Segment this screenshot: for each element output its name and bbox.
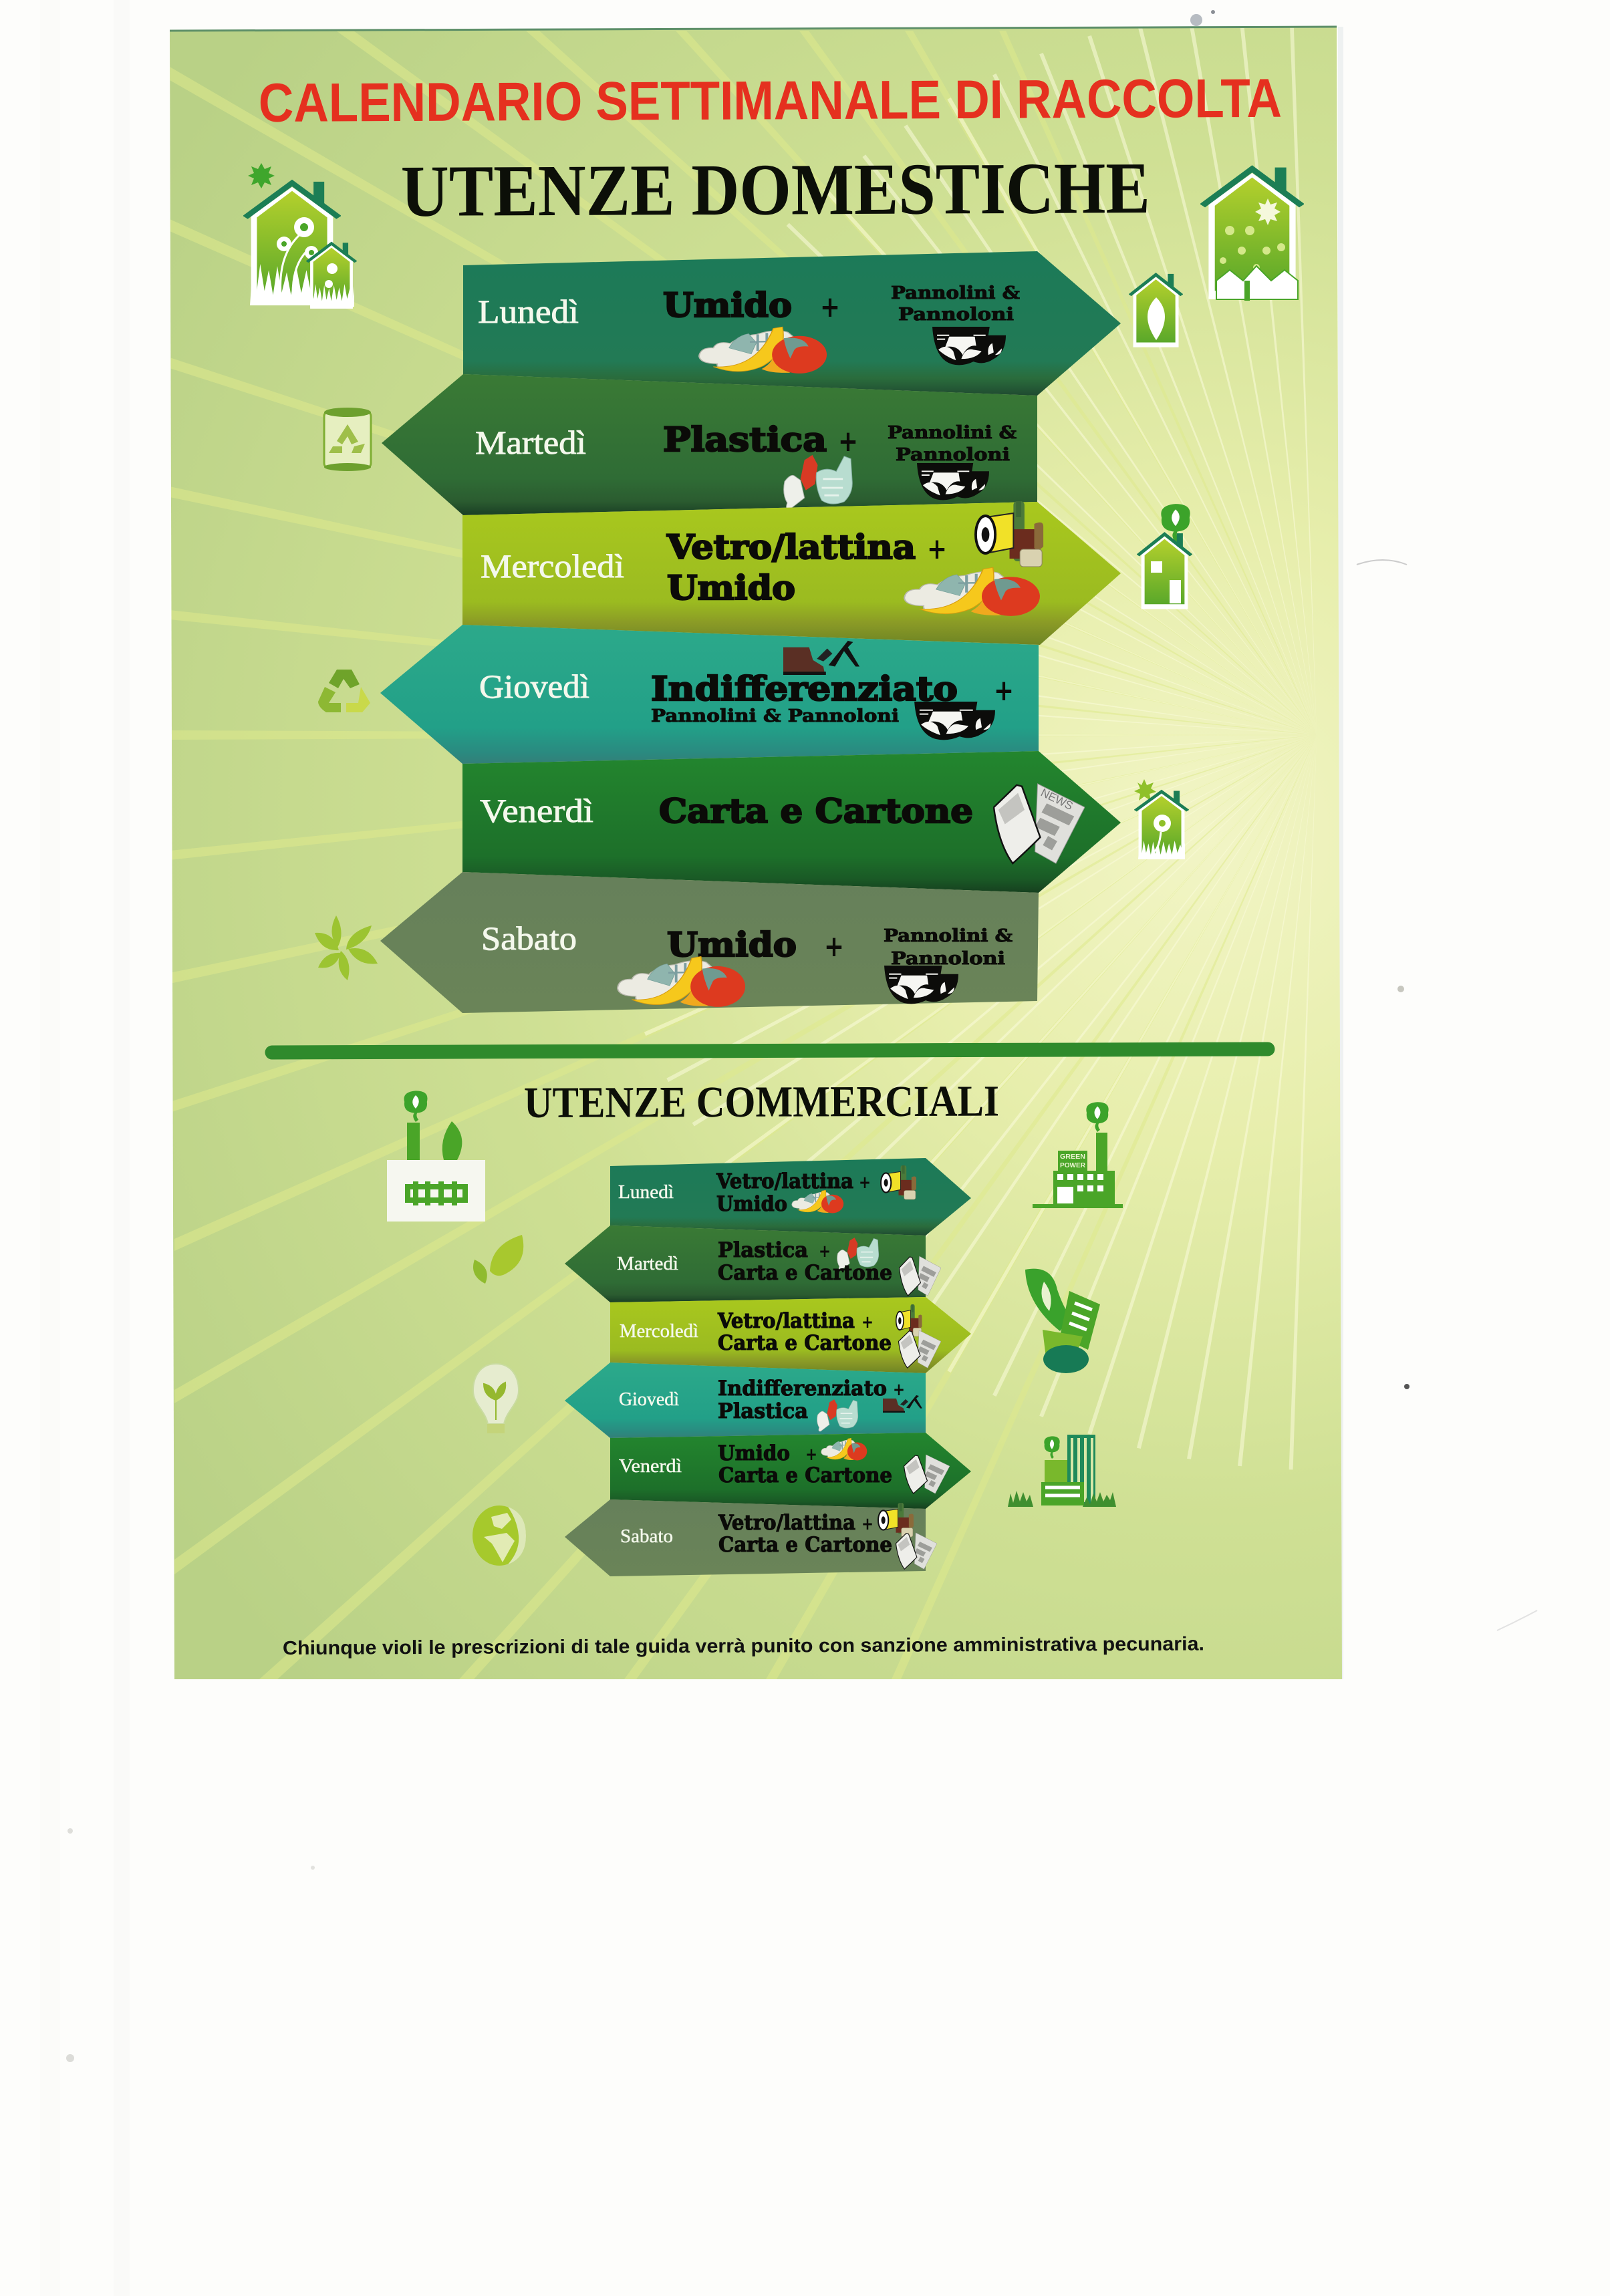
banner: Mercoledì commercial: + <box>861 1312 874 1332</box>
banner: Venerdì commercial: Venerdì <box>619 1455 682 1477</box>
banner: Martedì commercial: Martedì <box>617 1253 678 1274</box>
banner: Lunedì domestic: Pannolini & <box>891 283 1020 303</box>
banner: Sabato domestic: Pannolini & <box>884 926 1013 946</box>
banner: Giovedì commercial: Indifferenziato <box>718 1377 887 1401</box>
icon: garden house right <box>1202 168 1302 301</box>
icon: leaf house <box>1130 274 1182 347</box>
banner: Mercoledì commercial: Mercoledì <box>620 1320 698 1342</box>
icon: two leaves <box>473 1235 523 1284</box>
banner: Giovedì commercial: Plastica <box>718 1399 808 1423</box>
banner: Giovedì domestic: Indifferenziato <box>651 669 958 708</box>
icon: green house with tree smoke <box>1138 504 1191 609</box>
banner: Giovedì domestic: Giovedì <box>479 668 589 705</box>
icon: white factory card <box>387 1091 485 1222</box>
icon: green city <box>1008 1435 1116 1507</box>
banner: Sabato domestic: Umido <box>667 925 797 964</box>
banner: Giovedì domestic: + <box>994 674 1014 708</box>
banner: Mercoledì domestic: Umido <box>667 568 795 607</box>
banner: Martedì commercial: + <box>819 1242 831 1262</box>
banner: Lunedì domestic: Umido <box>663 285 792 325</box>
banner: Martedì domestic: Martedì <box>475 424 586 461</box>
poster panel <box>170 1 1342 1679</box>
banner: Sabato domestic: Pannoloni <box>891 949 1005 969</box>
banner: Martedì commercial: Plastica <box>718 1238 808 1262</box>
banner: Sabato domestic: Sabato <box>481 919 577 957</box>
banner: Lunedì domestic: Lunedì <box>478 293 579 330</box>
banner: Giovedì domestic <box>380 625 1039 764</box>
divider bar <box>272 1049 1268 1052</box>
banner: Martedì commercial: Carta e Cartone <box>718 1261 892 1285</box>
banner: Mercoledì domestic <box>462 501 1121 645</box>
banner: Venerdì commercial: Umido <box>718 1441 790 1465</box>
banner: Lunedì domestic <box>463 251 1121 396</box>
banner: Sabato commercial: Vetro/lattina <box>718 1511 855 1535</box>
banner: Venerdì commercial <box>610 1433 971 1509</box>
banner: Martedì domestic: Pannoloni <box>896 445 1010 465</box>
icon: recycle arrows <box>318 670 370 712</box>
banner: Lunedì commercial: + <box>859 1173 871 1193</box>
title: CALENDARIO SETTIMANALE DI RACCOLTA <box>259 68 1282 134</box>
icon: green power factory: GREEN <box>1060 1153 1085 1161</box>
icon: flower houses left <box>245 163 356 309</box>
banner: Mercoledì domestic: + <box>927 532 947 566</box>
panel: domestic weekly schedule <box>380 251 1121 1013</box>
icon: light bulb with leaves <box>473 1364 519 1433</box>
banner: Venerdì domestic <box>462 751 1121 893</box>
banner: Sabato domestic <box>380 872 1039 1013</box>
banner: Venerdì commercial: + <box>805 1445 817 1465</box>
banner: Martedì domestic <box>382 374 1037 515</box>
banner: Sabato commercial <box>565 1499 937 1576</box>
banner: Giovedì domestic: Pannolini & Pannoloni <box>651 706 899 726</box>
banner: Martedì commercial <box>565 1226 941 1302</box>
banner: Lunedì commercial <box>610 1158 971 1236</box>
footer note: Chiunque violi le prescrizioni di tale guida verrà punito con sanzione amministrativa pecunaria. <box>283 1634 1204 1659</box>
heading: utenze domestiche: UTENZE DOMESTICHE <box>401 147 1150 232</box>
heading: utenze commerciali: UTENZE COMMERCIALI <box>524 1077 999 1127</box>
banner: Mercoledì commercial <box>610 1297 971 1373</box>
icon: green power factory <box>1033 1102 1123 1208</box>
banner: Mercoledì domestic: Mercoledì <box>481 547 624 585</box>
icon: flower house <box>1134 779 1188 859</box>
banner: Mercoledì domestic: Vetro/lattina <box>666 527 916 567</box>
icon: globe <box>473 1505 526 1566</box>
banner: Martedì domestic: + <box>838 424 858 458</box>
banner: Martedì domestic: Plastica <box>663 420 827 459</box>
banner: Sabato domestic: + <box>824 929 844 964</box>
banner: Venerdì domestic: Carta e Cartone <box>659 791 973 831</box>
banner: Lunedì commercial: Lunedì <box>618 1181 674 1203</box>
banner: Venerdì domestic: NEWS <box>1039 786 1075 813</box>
banner: Sabato commercial: Carta e Cartone <box>718 1533 892 1557</box>
banner: Mercoledì commercial: Vetro/lattina <box>717 1309 855 1333</box>
panel: commercial weekly schedule <box>565 1158 971 1576</box>
banner: Sabato commercial: + <box>861 1514 874 1534</box>
icon: green flower leaves <box>315 915 378 980</box>
banner: Venerdì domestic: Venerdì <box>480 792 593 829</box>
icon: leaf and city <box>1025 1269 1100 1373</box>
icon: green power factory: POWER <box>1060 1162 1086 1169</box>
icon: recycling can <box>324 408 371 471</box>
banner: Giovedì commercial: + <box>893 1380 905 1400</box>
banner: Lunedì domestic: Pannoloni <box>898 305 1014 325</box>
banner: Lunedì commercial: Vetro/lattina <box>716 1169 853 1193</box>
banner: Martedì domestic: Pannolini & <box>888 423 1017 443</box>
banner: Giovedì commercial <box>565 1362 926 1438</box>
banner: Lunedì domestic: + <box>820 290 840 324</box>
banner: Venerdì commercial: Carta e Cartone <box>718 1463 892 1487</box>
banner: Sabato commercial: Sabato <box>620 1526 673 1547</box>
banner: Giovedì commercial: Giovedì <box>619 1389 679 1410</box>
banner: Mercoledì commercial: Carta e Cartone <box>718 1331 892 1355</box>
banner: Lunedì commercial: Umido <box>716 1192 787 1216</box>
